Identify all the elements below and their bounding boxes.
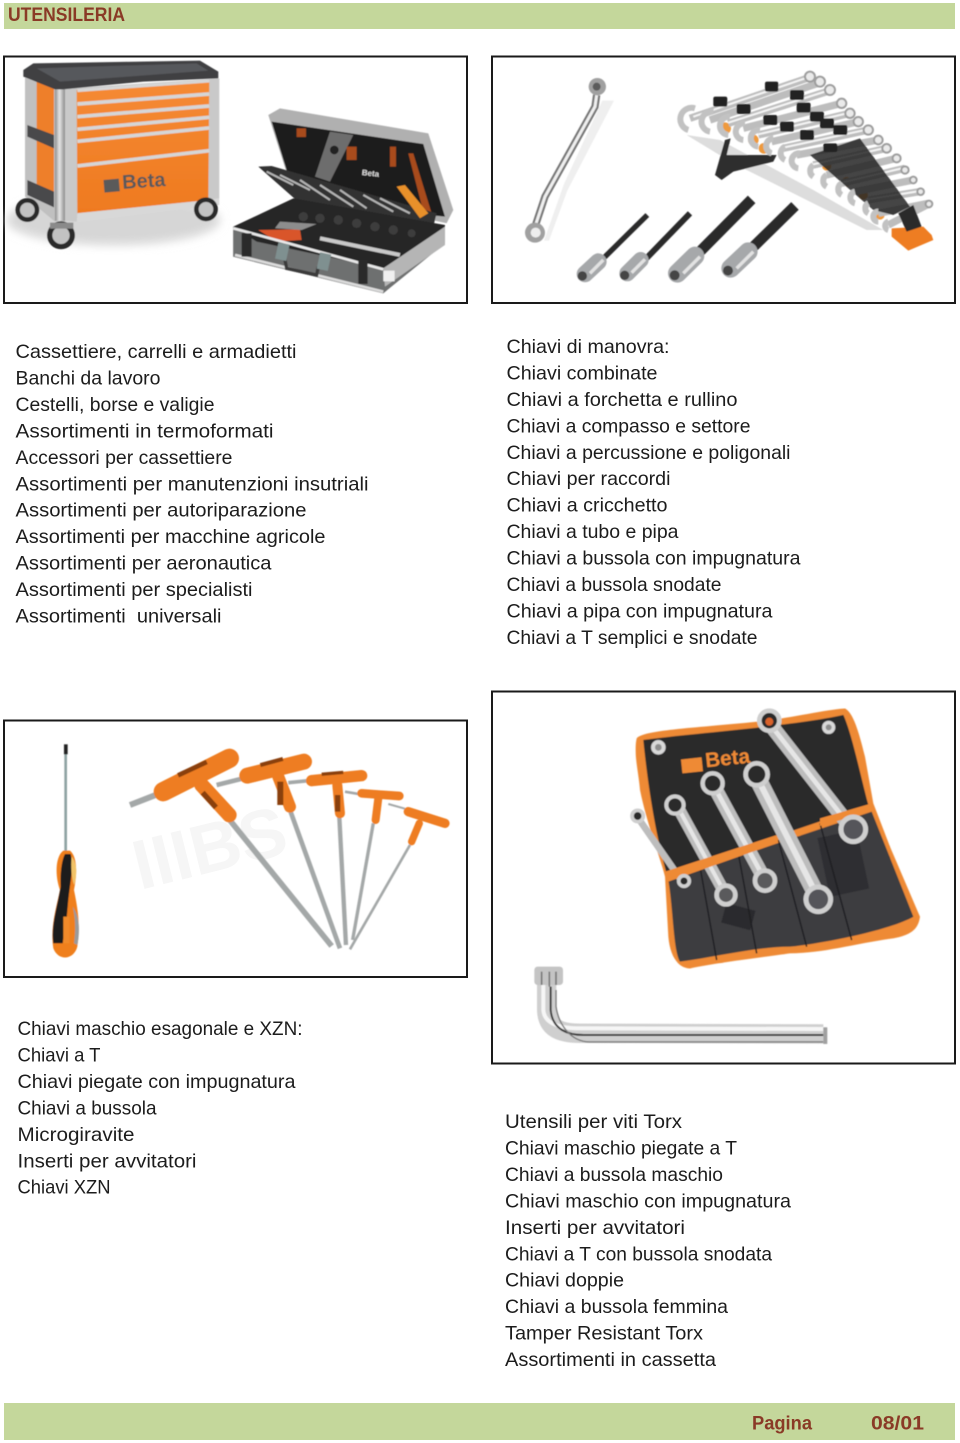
text block: hex and XZN keys: Chiavi maschio esagonale e XZN: [18, 1018, 302, 1040]
text block: cabinets and assortments: Assortimenti per autoriparazione [16, 500, 306, 522]
panel: screwdriver and T-handle keys [4, 720, 467, 977]
text block: wrench types: Chiavi a cricchetto [506, 495, 668, 517]
text block: Torx tools: Utensili per viti Torx [505, 1111, 682, 1133]
text block: hex and XZN keys: Chiavi piegate con impugnatura [18, 1071, 296, 1093]
text block: cabinets and assortments: Banchi da lavoro [16, 368, 161, 390]
text block: wrench types: Chiavi per raccordi [506, 468, 670, 490]
watermark: IIIBS [125, 791, 295, 905]
text block: wrench types: Chiavi a compasso e settore [506, 415, 750, 437]
panel: ratchet wrench pouch and Torx L-key [492, 692, 955, 1064]
text block: cabinets and assortments: Assortimenti per aeronautica [16, 553, 272, 575]
text block: cabinets and assortments [16, 341, 368, 628]
text block: cabinets and assortments: Accessori per cassettiere [16, 447, 232, 469]
panel: tool cabinet and case [4, 56, 467, 303]
text block: hex and XZN keys: Inserti per avvitatori [18, 1150, 196, 1172]
image: screwdriver [52, 744, 79, 958]
image: wrench pouch [632, 708, 920, 968]
text block: Torx tools: Inserti per avvitatori [505, 1217, 685, 1239]
image: open tool case [233, 108, 453, 293]
text block: cabinets and assortments: Assortimenti per manutenzioni insutriali [16, 473, 368, 495]
page number: 08/01 [871, 1412, 924, 1434]
text block: wrench types: Chiavi a tubo e pipa [506, 521, 679, 543]
text block: hex and XZN keys: Chiavi XZN [18, 1177, 110, 1199]
text block: cabinets and assortments: Assortimenti per specialisti [16, 579, 252, 601]
image: socket bits [578, 199, 795, 281]
text block: wrench types: Chiavi a bussola snodate [506, 574, 722, 596]
image: orange tool cabinet [7, 61, 220, 249]
text block: cabinets and assortments: Assortimenti in termoformati [16, 420, 274, 442]
text block: Torx tools: Tamper Resistant Torx [505, 1323, 703, 1345]
text block: Torx tools: Chiavi a bussola femmina [505, 1296, 728, 1318]
text block: wrench types: Chiavi a pipa con impugnatura [506, 600, 773, 622]
text block: Torx tools: Assortimenti in cassetta [505, 1349, 716, 1371]
footer bar [4, 1403, 955, 1440]
text block: wrench types: Chiavi di manovra: [506, 336, 670, 358]
header bar [4, 3, 955, 29]
text block: cabinets and assortments: Assortimenti universali [16, 606, 222, 628]
text block: hex and XZN keys [18, 1018, 302, 1199]
text block: Torx tools: Chiavi doppie [505, 1270, 624, 1292]
text block: cabinets and assortments: Assortimenti per macchine agricole [16, 526, 325, 548]
page label: Pagina [752, 1412, 812, 1434]
text block: cabinets and assortments: Cestelli, borse e valigie [16, 394, 214, 416]
text block: wrench types: Chiavi combinate [506, 362, 658, 384]
text block: wrench types: Chiavi a forchetta e rullino [506, 389, 738, 411]
image: Torx L-key [534, 967, 827, 1044]
text block: Torx tools: Chiavi a T con bussola snodata [505, 1243, 772, 1265]
text block: Torx tools [505, 1111, 791, 1371]
image: orange tool cabinet: Beta [121, 169, 167, 194]
text block: wrench types [506, 336, 801, 649]
text block: cabinets and assortments: Cassettiere, carrelli e armadietti [16, 341, 296, 363]
text block: Torx tools: Chiavi maschio piegate a T [505, 1138, 737, 1160]
text block: Torx tools: Chiavi a bussola maschio [505, 1164, 723, 1186]
panel: wrenches and sockets [492, 56, 955, 303]
text block: hex and XZN keys: Microgiravite [18, 1124, 134, 1146]
title: UTENSILERIA [8, 4, 125, 26]
image: T-handle keys [130, 757, 445, 949]
text block: Torx tools: Chiavi maschio con impugnatura [505, 1190, 791, 1212]
image: open tool case: Beta [361, 168, 380, 179]
image: combination wrench set on orange rack [680, 72, 933, 251]
text block: wrench types: Chiavi a T semplici e snodate [506, 627, 758, 649]
text block: wrench types: Chiavi a bussola con impugnatura [506, 548, 801, 570]
image: wrench pouch: Beta [704, 745, 752, 772]
image: double ring wrench [525, 78, 614, 243]
text block: wrench types: Chiavi a percussione e poligonali [506, 442, 790, 464]
text block: hex and XZN keys: Chiavi a bussola [18, 1097, 157, 1119]
text block: hex and XZN keys: Chiavi a T [18, 1044, 101, 1066]
